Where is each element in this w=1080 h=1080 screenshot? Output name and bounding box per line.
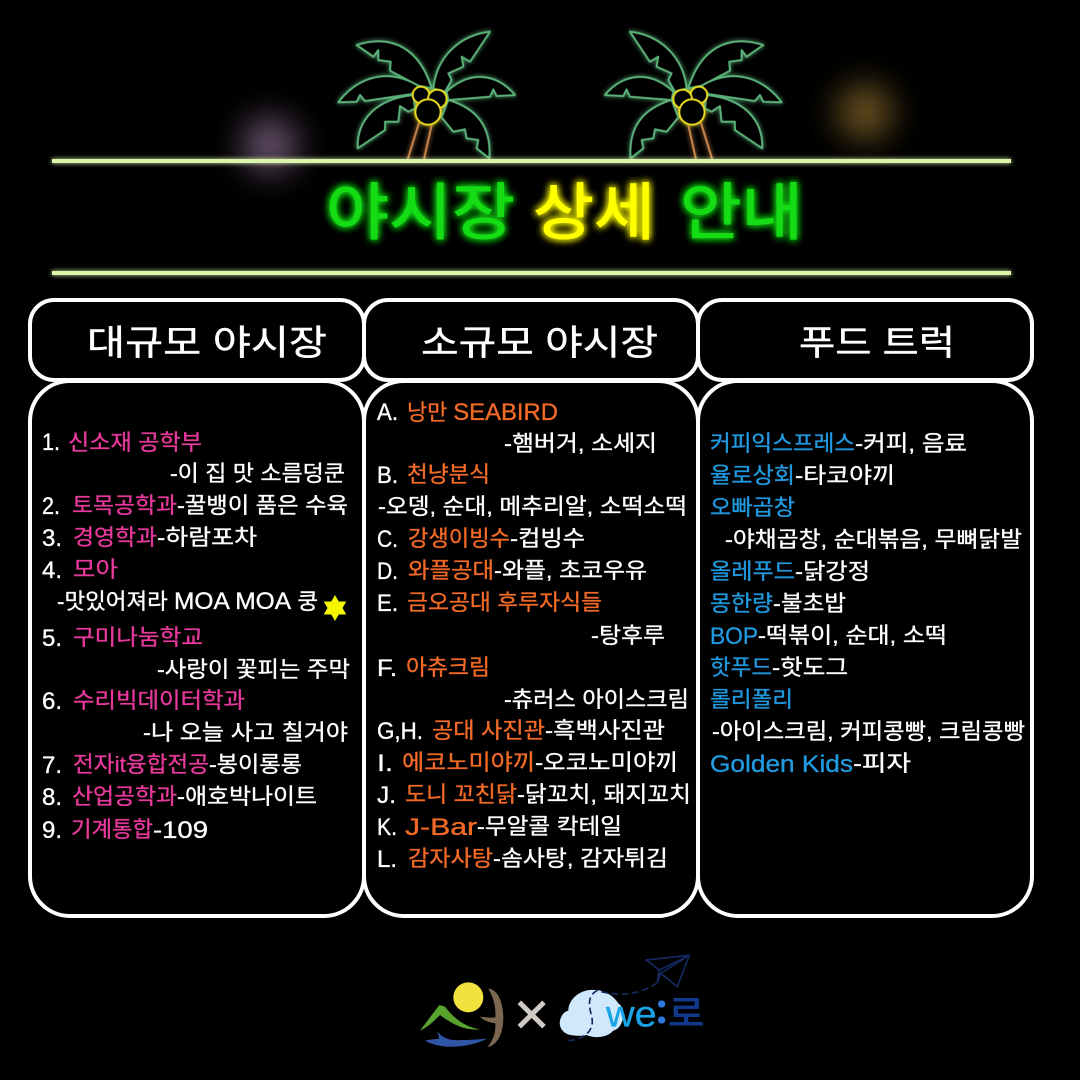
list: -이 집 맛 소름덩쿤 xyxy=(170,461,345,486)
list: -피자 xyxy=(853,751,911,776)
list: 감자사탕 xyxy=(408,846,493,871)
list: 공대 사진관 xyxy=(432,718,545,743)
list: -나 오늘 사고 칠거야 xyxy=(143,720,348,745)
list: -흑백사진관 xyxy=(545,718,665,743)
list: I. xyxy=(377,750,393,777)
list: -컵빙수 xyxy=(510,526,585,551)
list: BOP xyxy=(710,623,758,650)
list: B. xyxy=(377,462,398,489)
panel: small night market xyxy=(364,300,698,916)
list: E. xyxy=(377,590,398,617)
heading: 푸드 트럭 xyxy=(799,324,955,363)
title: 안내 xyxy=(680,162,803,252)
list: -109 xyxy=(153,817,208,844)
list: 신소재 공학부 xyxy=(68,430,202,455)
list: -꿀뱅이 품은 수육 xyxy=(177,493,348,518)
list: -닭강정 xyxy=(795,559,870,584)
list: 6. xyxy=(42,688,62,715)
list: L. xyxy=(377,846,397,873)
list xyxy=(42,429,350,844)
list xyxy=(377,399,691,873)
logos xyxy=(420,955,704,1047)
neon line top xyxy=(52,159,1011,163)
list: -오코노미야끼 xyxy=(535,750,678,775)
list: 에코노미야끼 xyxy=(402,750,535,775)
list: -핫도그 xyxy=(772,655,848,680)
list: 산업공학과 xyxy=(72,784,177,809)
list: D. xyxy=(377,558,398,585)
list: 오빠곱창 xyxy=(710,495,795,520)
list: -햄버거, 소세지 xyxy=(504,431,657,456)
list: 1. xyxy=(42,429,60,456)
list: 9. xyxy=(42,817,62,844)
list: J. xyxy=(377,782,396,809)
list: -애호박나이트 xyxy=(177,784,317,809)
panel: food truck xyxy=(698,300,1032,916)
title: 상세 xyxy=(533,162,655,252)
list: -아이스크림, 커피콩빵, 크림콩빵 xyxy=(712,719,1025,744)
list: K. xyxy=(377,814,397,841)
list: 모아 xyxy=(73,557,118,582)
list: A. xyxy=(377,399,398,426)
list: -무알콜 칵테일 xyxy=(477,814,622,839)
list: -커피, 음료 xyxy=(855,431,967,456)
list: 4. xyxy=(42,557,62,584)
list: -솜사탕, 감자튀김 xyxy=(493,846,668,871)
icon: yellow star xyxy=(324,595,346,621)
list: 아츄크림 xyxy=(406,655,490,680)
list: 금오공대 후루자식들 xyxy=(407,590,602,615)
icon: neon palm trees xyxy=(338,32,782,159)
list: -오뎅, 순대, 메추리알, 소떡소떡 xyxy=(378,494,687,519)
header box xyxy=(30,300,364,380)
list: 수리빅데이터학과 xyxy=(73,688,245,713)
heading: 대규모 야시장 xyxy=(87,324,327,363)
list: 올레푸드 xyxy=(710,559,795,584)
logo: we:로: we xyxy=(605,994,657,1035)
list: 롤리폴리 xyxy=(710,687,793,712)
title: 야시장 xyxy=(326,162,515,252)
list: -와플, 초코우유 xyxy=(494,558,647,583)
list: 8. xyxy=(42,784,62,811)
list xyxy=(710,431,1025,778)
list: -야채곱창, 순대볶음, 무뼈닭발 xyxy=(725,527,1022,552)
list: 경영학과 xyxy=(73,525,157,550)
logo: we:로 xyxy=(560,955,704,1041)
list: -타코야끼 xyxy=(795,463,895,488)
panel: large night market xyxy=(30,300,364,916)
list: -사랑이 꽃피는 주막 xyxy=(157,657,350,682)
list: 와플공대 xyxy=(408,558,494,583)
heading: 소규모 야시장 xyxy=(421,324,658,363)
list: 7. xyxy=(42,752,62,779)
body box xyxy=(364,381,698,916)
icon: left palm tree xyxy=(338,32,515,159)
title xyxy=(326,162,803,252)
list: -맛있어져라 MOA MOA 쿵 xyxy=(57,588,318,615)
purple glow spot xyxy=(243,118,297,172)
body box xyxy=(30,381,364,916)
list: 2. xyxy=(42,493,60,520)
header box xyxy=(364,300,698,380)
list: 몽한량 xyxy=(710,591,773,616)
header box xyxy=(698,300,1032,380)
list: 구미나눔학교 xyxy=(73,625,203,650)
list: 기계통합 xyxy=(71,817,153,842)
list: F. xyxy=(377,655,397,682)
list: 천냥분식 xyxy=(407,462,490,487)
list: 낭만 SEABIRD xyxy=(407,399,558,426)
list: -닭꼬치, 돼지꼬치 xyxy=(517,782,691,807)
list: J-Bar xyxy=(405,814,477,841)
neon line bottom xyxy=(52,271,1011,275)
list: 도니 꼬친닭 xyxy=(405,782,517,807)
list: -봉이롱롱 xyxy=(209,752,302,777)
list: G,H. xyxy=(377,718,423,745)
list: -불초밥 xyxy=(773,591,846,616)
list: 전자it융합전공 xyxy=(73,752,209,777)
list: 커피익스프레스 xyxy=(710,431,855,456)
list: -탕후루 xyxy=(591,623,665,648)
list: 강생이빙수 xyxy=(408,526,510,551)
list: C. xyxy=(377,526,398,553)
list: 3. xyxy=(42,525,62,552)
list: -떡볶이, 순대, 소떡 xyxy=(758,623,947,648)
icon: right palm tree xyxy=(605,32,782,159)
list: 토목공학과 xyxy=(72,493,177,518)
list: -하람포차 xyxy=(157,525,257,550)
list: 율로상회 xyxy=(710,463,795,488)
list: Golden Kids xyxy=(710,751,853,778)
icon: multiply sign xyxy=(519,1002,544,1027)
logo: sun and mountain xyxy=(420,982,503,1047)
list: 핫푸드 xyxy=(710,655,772,680)
logo: we:로: 로 xyxy=(668,985,704,1037)
brown glow spot xyxy=(838,85,892,139)
list: -츄러스 아이스크림 xyxy=(504,687,689,712)
list: 5. xyxy=(42,625,62,652)
body box xyxy=(698,381,1032,916)
